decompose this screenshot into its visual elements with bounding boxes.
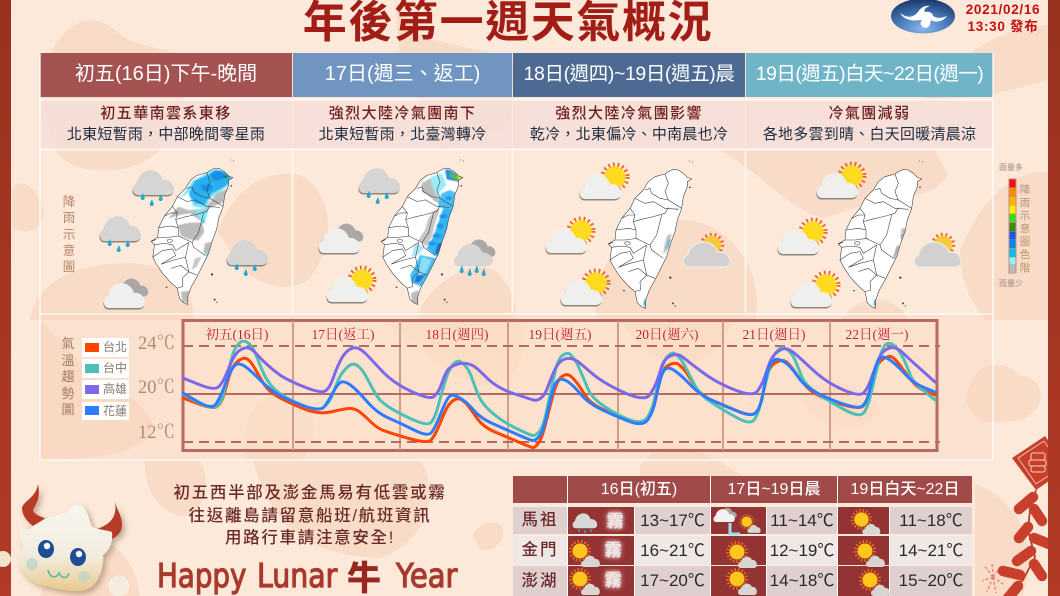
period header 2: 17日(週三、返工) <box>325 63 480 85</box>
body and horns <box>18 484 122 591</box>
series: Taipei <box>183 356 935 448</box>
icon: sun and cloud <box>545 218 594 254</box>
icon: sun and cloud <box>790 272 838 308</box>
summary 2: 強烈大陸冷氣團南下 <box>329 105 476 122</box>
vertical label: rainfall: 示 <box>63 228 75 242</box>
publish date <box>966 2 1040 34</box>
summary 1: 初五華南雲系東移 <box>100 105 232 122</box>
station: Kinmen: 金門 <box>522 541 558 559</box>
icon: sun <box>852 510 880 535</box>
eyes <box>38 540 54 558</box>
day labels <box>206 327 908 342</box>
vertical label: temperature trend: 趨 <box>61 369 74 384</box>
temperature 17~20: 17~20℃ <box>640 571 705 590</box>
temperature 12~19: 12~19℃ <box>770 541 834 560</box>
chart frame <box>183 320 940 450</box>
temperature 11~18: 11~18℃ <box>899 511 963 530</box>
map: rainfall day 3 <box>608 160 693 308</box>
vertical label: temperature trend: 氣 <box>61 336 74 351</box>
notice text <box>174 484 446 547</box>
legend: more rain: 雨量多 <box>999 163 1023 172</box>
publish date: 2021/02/16 <box>966 2 1040 17</box>
greeting: Happy Lunar Year <box>157 556 458 596</box>
row Penghu background <box>513 566 972 596</box>
icon: rain cloud <box>132 170 174 206</box>
table header blank <box>513 476 567 503</box>
map: rainfall day 2 <box>381 159 464 305</box>
publish date: 13:30 發布 <box>968 19 1038 34</box>
icon: cold front <box>714 508 761 534</box>
vertical label: temperature trend <box>61 336 74 417</box>
map: rainfall day 1 <box>151 159 234 305</box>
legend item: Hualien <box>82 402 129 420</box>
row Kinmen background <box>513 536 972 565</box>
axis labels <box>138 334 175 443</box>
vertical label: rainfall: 圖 <box>63 260 75 274</box>
period header 4 <box>746 53 993 97</box>
legend item: Taipei <box>82 338 129 357</box>
icon: sun <box>856 542 885 567</box>
icon: rain cloud <box>99 216 141 252</box>
legend: vertical caption: 降 <box>1020 184 1030 196</box>
rainfall map panel 2 <box>318 160 496 305</box>
crackers <box>1003 497 1049 596</box>
legend: vertical caption: 色 <box>1020 249 1030 261</box>
pearls <box>108 576 130 596</box>
rainfall map panel 4 <box>778 160 962 309</box>
icon: rain cloud <box>358 168 400 204</box>
icon: sun and cloud <box>560 270 608 306</box>
series: Kaohsiung <box>183 348 935 400</box>
mascot: ox <box>0 484 130 596</box>
temperature 14~18: 14~18℃ <box>770 571 834 590</box>
rainfall colour scale legend <box>999 163 1030 288</box>
legend: vertical caption: 示 <box>1020 210 1030 222</box>
notice text: 用路行車請注意安全! <box>225 529 395 547</box>
summary 2 <box>293 101 512 148</box>
vertical label: temperature trend: 圖 <box>61 402 74 417</box>
summary 2: 北東短暫雨，北臺灣轉冷 <box>319 126 486 142</box>
summary 3: 乾冷，北東偏冷、中南晨也冷 <box>530 126 728 142</box>
icon: sun <box>860 570 890 596</box>
temperature 11~14: 11~14℃ <box>770 511 834 530</box>
string <box>1010 490 1036 590</box>
notice text: 往返離島請留意船班/航班資訊 <box>189 507 431 525</box>
greeting: Happy Lunar Year: Happy <box>157 556 246 595</box>
icon: sun and cloud <box>816 164 864 200</box>
greeting: Happy Lunar Year: Lunar <box>257 556 337 595</box>
icon: rain cloud <box>226 240 268 276</box>
icon: light rain <box>573 513 597 533</box>
legend: vertical caption: 圖 <box>1020 236 1030 248</box>
day labels: 21日(週日) <box>742 327 806 342</box>
fog label: 霧 <box>604 571 622 590</box>
station: Matsu: 馬祖 <box>522 511 558 529</box>
legend: less rain: 雨量少 <box>999 279 1023 288</box>
charm <box>1012 436 1060 490</box>
notice text: 初五西半部及澎金馬易有低雲或霧 <box>174 484 446 502</box>
icon: sun and cloud <box>579 164 628 200</box>
summary 3: 強烈大陸冷氣團影響 <box>555 105 703 122</box>
table header 16th: 16日(初五) <box>601 481 677 498</box>
legend: temperature series <box>82 338 129 420</box>
legend: colour bar <box>1008 178 1016 274</box>
icon: sun and cloud <box>777 220 826 256</box>
summary 4: 冷氣團減弱 <box>828 105 910 122</box>
legend: vertical caption: 階 <box>1020 262 1030 274</box>
axis labels: 12℃ <box>138 423 175 443</box>
temperature 14~21: 14~21℃ <box>899 541 963 560</box>
day labels: 18日(週四) <box>426 327 488 342</box>
vertical label: temperature trend: 溫 <box>61 353 74 368</box>
legend item: Hualien: 花蓮 <box>103 404 127 418</box>
rainfall map panel 1 <box>100 160 268 310</box>
legend item: Taichung <box>82 359 129 378</box>
summary 4: 各地多雲到晴、白天回暖清晨涼 <box>763 126 976 142</box>
rainfall map panel 3 <box>545 160 731 309</box>
station: Penghu: 澎湖 <box>522 572 558 590</box>
row Matsu background <box>513 507 972 534</box>
summary 1 <box>40 101 292 148</box>
period header 1: 初五(16日)下午-晚間 <box>75 63 257 85</box>
right side bar <box>1048 0 1060 596</box>
day labels: 17日(返工) <box>312 327 374 342</box>
left side bar <box>0 0 11 596</box>
period header 1 <box>40 53 292 97</box>
vertical label: temperature trend: 勢 <box>61 386 74 401</box>
table header 17-19: 17日~19日晨 <box>728 481 820 498</box>
period header 3: 18日(週四)~19日(週五)晨 <box>524 63 734 85</box>
axis labels: 20℃ <box>138 378 175 398</box>
period header 4: 19日(週五)白天~22日(週一) <box>756 63 983 85</box>
day labels: 20日(週六) <box>636 327 698 342</box>
day labels: 19日(週五) <box>528 327 592 342</box>
legend item: Taichung: 台中 <box>103 361 127 375</box>
icon: grey cloud with sun <box>683 234 730 267</box>
fog label: 霧 <box>606 512 624 531</box>
legend item: Kaohsiung <box>82 380 129 399</box>
vertical label: rainfall: 意 <box>63 244 75 258</box>
table header 19-22: 19日白天~22日 <box>851 481 959 498</box>
series: Hualien <box>183 357 935 441</box>
temperature 13~17: 13~17℃ <box>640 511 705 530</box>
summary 3 <box>513 101 745 148</box>
cheeks and mouth <box>26 558 38 570</box>
logo <box>891 0 955 34</box>
legend: vertical caption <box>1020 184 1030 274</box>
summary 4 <box>746 101 993 148</box>
vertical label: rainfall: 降 <box>63 195 75 209</box>
temperature trend chart <box>138 319 940 452</box>
summary 1: 北東短暫雨，中部晚間零星雨 <box>67 126 265 142</box>
icon: sun and cloud <box>326 268 374 304</box>
fog label: 霧 <box>604 541 622 560</box>
temperature 16~21: 16~21℃ <box>640 541 705 560</box>
axis labels: 24℃ <box>138 334 175 354</box>
temperature 15~20: 15~20℃ <box>899 571 963 590</box>
legend: vertical caption: 意 <box>1020 223 1030 235</box>
period header 2 <box>293 53 512 97</box>
greeting: Happy Lunar Year: Year <box>396 556 457 595</box>
decoration: firecrackers and charm <box>982 436 1048 596</box>
icon: sun <box>570 570 600 595</box>
panel frame lines <box>39 53 994 461</box>
vertical label: rainfall: 雨 <box>63 211 75 225</box>
icon: sun <box>728 570 757 595</box>
day labels: 22日(週一) <box>846 327 908 342</box>
icon: sun <box>570 542 600 567</box>
legend item: Taipei: 台北 <box>103 340 127 354</box>
legend item: Kaohsiung: 高雄 <box>103 382 127 396</box>
table header 19-22 <box>838 476 972 503</box>
vertical label: rainfall <box>63 195 75 274</box>
icon: cloudy <box>103 279 148 310</box>
fireworks <box>982 563 1003 593</box>
icon: grey cloud with sun <box>914 234 961 267</box>
legend: vertical caption: 雨 <box>1020 197 1030 209</box>
table header 16th <box>568 476 710 503</box>
day labels: 初五(16日) <box>206 327 268 342</box>
period header 3 <box>513 53 745 97</box>
icon: rain and cloud <box>454 240 495 276</box>
icon: cloudy <box>318 224 363 254</box>
icon: sun <box>728 542 757 568</box>
series: Taichung <box>183 341 935 436</box>
table header 17-19 <box>711 476 837 503</box>
map: rainfall day 4 <box>838 160 923 308</box>
